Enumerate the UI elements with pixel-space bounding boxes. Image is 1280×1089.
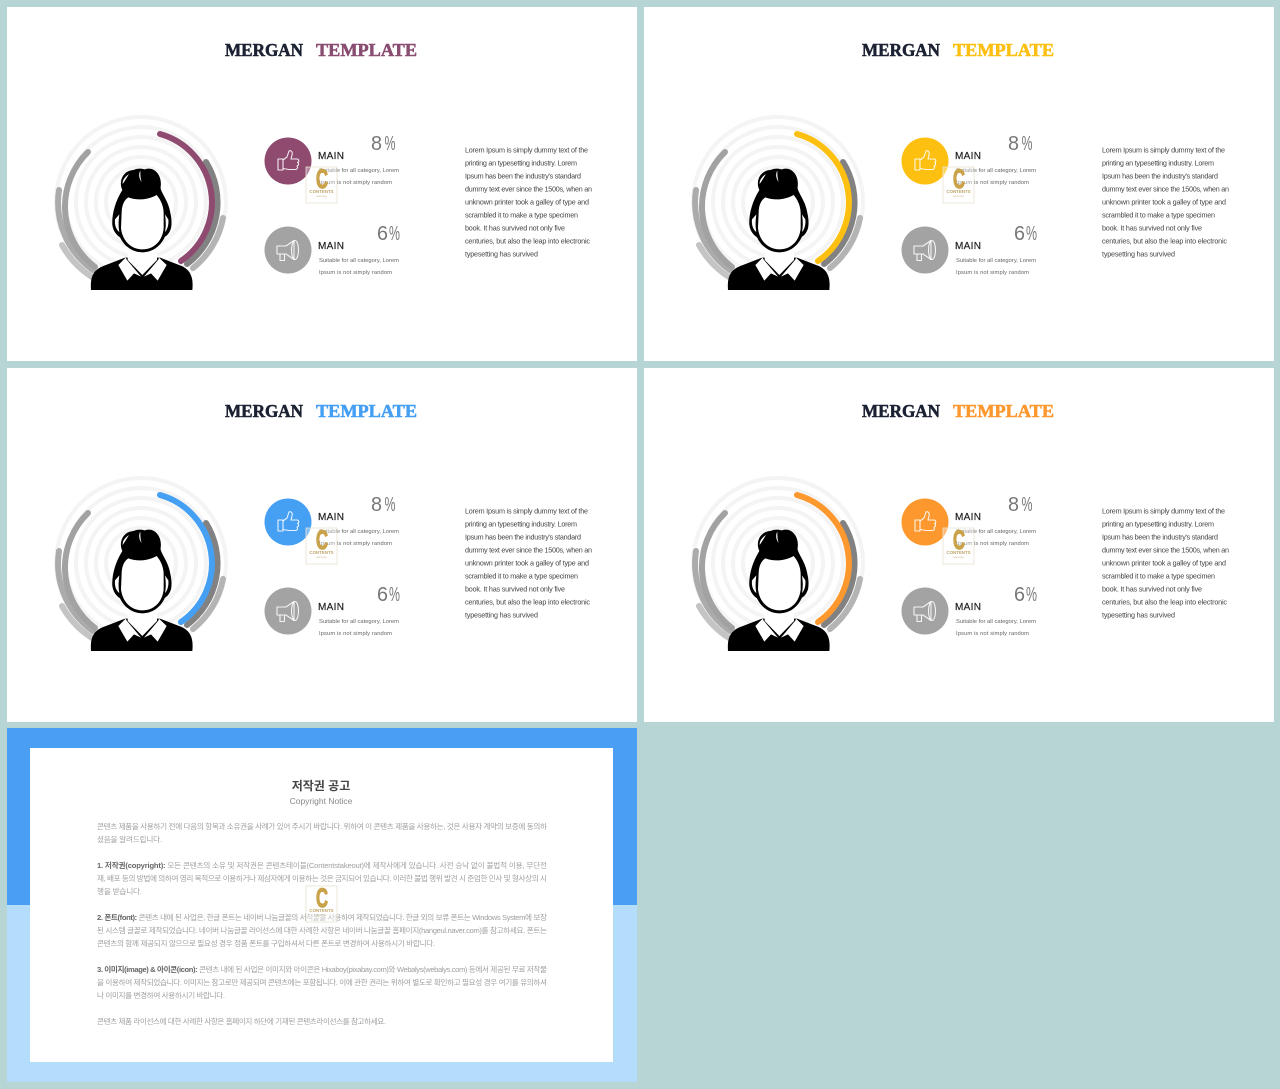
icon: person portrait [91,169,193,290]
number: 8 percent: 8 [1008,133,1019,155]
number: 8 percent: % [1022,133,1033,155]
label block: main 2: MAIN [318,241,344,252]
label block: main 2 [318,241,399,276]
title accent word: TEMPLATE [953,401,1054,421]
text block: description: printing an typesetting industry. Lorem [1102,158,1214,168]
label block: main 1 [955,512,1036,547]
number: 8 percent: % [384,494,396,516]
text block: description: dummy text ever since the 1500s, when an [465,546,592,554]
text block: description: Lorem Ipsum is simply dummy text of the [1102,146,1225,154]
label block: main 1: MAIN [318,512,344,523]
text block: description: typesetting has survived [1102,250,1175,258]
panel: slide 2 yellow [644,7,1274,361]
text block: description [465,146,592,258]
label block: main 2: Suitable for all category, Lorem [956,619,1036,625]
watermark logo [306,883,337,922]
number: 8 percent [371,133,396,155]
text block: clause 3 images and icons: 나 이미지를 변경하여 사용하시기 바랍니다. [97,990,225,1000]
text block: clause 2 font [97,912,547,948]
label block: main 1: MAIN [955,512,981,523]
text block: introduction [97,821,547,844]
label block: main 1: Suitable for all category, Lorem [956,529,1036,535]
text block: description: dummy text ever since the 1500s, when an [1102,546,1229,554]
number: 6 percent: 6 [1014,584,1025,606]
label block: main 1: Ipsum is not simply random [956,180,1029,186]
watermark logo: real copy [316,913,327,917]
watermark logo [943,164,974,203]
number: 6 percent: 6 [1014,223,1025,245]
text block: clause 1 copyright: 재, 배포 등의 방법에 의하여 영리 목적으로 이용하거나 제삼자에게 이용하는 것은 금지되어 있습니다. 이러한 불법 행위 발견 시 준엄한 민사 및 형사상의 시 [97,873,547,883]
watermark logo: real copy [316,555,327,559]
number: 6 percent: 6 [377,584,388,606]
icon: person portrait [728,169,830,290]
number: 6 percent [1014,223,1037,245]
icon: thumbs up badge [902,138,948,184]
text block: description: typesetting has survived [465,250,538,258]
text block: description: unknown printer took a galley of type and [1102,558,1226,568]
number: 6 percent [1014,584,1037,606]
number: 8 percent: 8 [1008,494,1019,516]
text block: clause 2 font: 콘텐츠의 함께 제공되지 않으므로 필요성 경우 정품 폰트를 구입하셔서 다른 폰트로 변경하여 사용하시기 바랍니다. [97,938,435,948]
label block: main 1: Ipsum is not simply random [319,180,392,186]
title accent word: TEMPLATE [953,40,1054,60]
chart: concentric rings and arcs [56,478,226,648]
title accent word: TEMPLATE [316,401,417,421]
text block: description: Lorem Ipsum is simply dummy text of the [465,146,588,154]
watermark logo: real copy [953,555,964,559]
label block: main 2: Ipsum is not simply random [319,631,392,637]
icon: megaphone badge [264,226,312,274]
icon: megaphone badge [902,226,948,274]
label block: main 2: Ipsum is not simply random [956,270,1029,276]
text block: description: book. It has survived not only five [1102,584,1202,594]
label block: main 1: MAIN [955,151,981,162]
icon: person portrait [728,530,830,651]
number: 8 percent: % [1022,494,1033,516]
text block: description: centuries, but also the leap into electronic [1102,236,1227,246]
watermark logo [306,164,337,203]
label block: main 2: Ipsum is not simply random [956,631,1029,637]
text block: description: centuries, but also the leap into electronic [465,598,590,606]
watermark logo: CONTENTS [946,189,971,194]
number: 6 percent: % [389,223,400,245]
text block: description: Ipsum has been the industry's standard [1102,532,1218,542]
icon: thumbs up badge [264,138,312,184]
text block: description: Lorem Ipsum is simply dummy text of the [465,506,588,516]
text block: clause 1 copyright: 1. 저작권(copyright): 모든 콘텐츠의 소유 및 저작권은 콘텐츠테이블(Contentstakeout)에 제작사에게 있습니다. 사전 승낙 없이 불법적 이용, 무단전 [97,860,547,870]
text block: description [1102,506,1229,620]
icon: megaphone badge [264,588,312,634]
chart: concentric rings and arcs [56,117,226,287]
text block: description [1102,146,1229,258]
number: 6 percent: % [1026,223,1037,245]
icon: person portrait [91,530,193,651]
text block: description: printing an typesetting industry. Lorem [465,158,577,168]
icon: thumbs up badge [264,498,312,546]
watermark logo [943,525,974,564]
text block: description: scrambled it to make a type specimen [465,210,578,220]
text block: description: book. It has survived not only five [1102,224,1202,232]
panel: copyright notice [7,728,637,1082]
number: 8 percent [371,494,396,516]
label block: main 1: Suitable for all category, Lorem [319,168,399,174]
text block: description: printing an typesetting industry. Lorem [465,520,577,528]
text block: clause 3 images and icons: 을 이용하여 제작되었습니다. 이미지는 참고로만 제공되며 콘텐츠에는 포함됩니다. 이에 관한 권리는 위하여 별도로 확인하고 필요성 경우 여기를 유의하셔 [97,977,547,987]
label block: main 1 [318,151,399,186]
number: 6 percent [377,223,400,245]
subheading: copyright notice English: Copyright Notice [290,796,353,806]
text block: description: typesetting has survived [465,610,538,620]
text block: clause 1 copyright [97,860,547,896]
text block: clause 3 images and icons [97,964,547,1000]
number: 8 percent [1008,494,1033,516]
watermark logo: C [316,164,328,194]
label block: main 1 [318,512,399,547]
text block: description: Ipsum has been the industry's standard [1102,172,1218,180]
title: MERGAN [225,401,303,421]
panel: slide 4 orange [644,368,1274,722]
number: 8 percent [1008,133,1033,155]
icon: megaphone badge [902,588,948,634]
watermark logo: C [953,164,965,194]
text block: description: dummy text ever since the 1500s, when an [465,184,592,194]
text block: description: typesetting has survived [1102,610,1175,620]
text block: description: scrambled it to make a type specimen [1102,572,1215,580]
number: 8 percent: 8 [371,494,382,516]
text block: description: unknown printer took a galley of type and [465,558,589,568]
text block: description: scrambled it to make a type specimen [1102,210,1215,220]
title: MERGAN [862,40,940,60]
label block: main 2: Suitable for all category, Lorem [319,619,399,625]
panel: slide 1 plum [7,7,637,361]
text block: description [465,506,592,620]
number: 6 percent: 6 [377,223,388,245]
title: MERGAN [225,40,303,60]
label block: main 2: MAIN [318,602,344,613]
number: 6 percent [377,584,400,606]
chart: concentric rings and arcs [693,117,863,287]
label block: main 1: Ipsum is not simply random [956,541,1029,547]
text block: clause 3 images and icons: 3. 이미지(image) & 아이콘(icon): 콘텐츠 내에 된 사업은 이미지와 아이콘은 Hixaboy(pixabay.com)와 Webalys(webalys.com) 등에서 제공된 무료 저작물 [97,964,547,974]
text block: description: unknown printer took a galley of type and [465,198,589,206]
text block: description: centuries, but also the leap into electronic [1102,598,1227,606]
text block: description: printing an typesetting industry. Lorem [1102,520,1214,528]
label block: main 2 [955,241,1036,276]
text block: clause 1 copyright: 행을 받습니다. [97,886,142,896]
watermark logo: real copy [953,194,964,198]
watermark logo: C [316,525,328,555]
number: 8 percent: 8 [371,133,382,155]
number: 8 percent: % [384,133,396,155]
label block: main 2 [955,602,1036,637]
watermark logo: CONTENTS [309,550,334,555]
label block: main 1 [955,151,1036,186]
text block: description: centuries, but also the leap into electronic [465,236,590,246]
watermark logo: C [316,883,328,913]
text block: description: dummy text ever since the 1500s, when an [1102,184,1229,194]
panel: slide 3 blue [7,368,637,722]
text block: description: Ipsum has been the industry's standard [465,532,581,542]
watermark logo: CONTENTS [309,908,334,913]
label block: main 1: Suitable for all category, Lorem [956,168,1036,174]
label block: main 1: Suitable for all category, Lorem [319,529,399,535]
text block: description: book. It has survived not only five [465,584,565,594]
watermark logo [306,525,337,564]
label block: main 1: MAIN [318,151,344,162]
text block: description: Lorem Ipsum is simply dummy text of the [1102,506,1225,516]
watermark logo: real copy [316,194,327,198]
number: 6 percent: % [389,584,400,606]
watermark logo: CONTENTS [946,550,971,555]
title: MERGAN [862,401,940,421]
text block: description: unknown printer took a galley of type and [1102,198,1226,206]
watermark logo: CONTENTS [309,189,334,194]
chart: concentric rings and arcs [693,478,863,648]
text block: introduction: 콘텐츠 제품을 사용하기 전에 다음의 항목과 소유권을 사례가 있어 주시기 바랍니다. 위하여 이 콘텐츠 제품을 사용하는, 것은 사용자 계약의 보증에 동의하 [97,821,547,831]
title accent word: TEMPLATE [316,40,417,60]
label block: main 1: Ipsum is not simply random [319,541,392,547]
text block: license note: 콘텐츠 제품 라이선스에 대한 사례한 사항은 홈페이지 하단에 기재된 콘텐츠라이선스를 참고하세요. [97,1016,386,1026]
number: 6 percent: % [1026,584,1037,606]
text block: introduction: 셨음을 알려드립니다. [97,834,162,844]
label block: main 2: MAIN [955,602,981,613]
text block: clause 2 font: 2. 폰트(font): 콘텐츠 내에 된 사업은, 한글 폰트는 네이버 나눔글꼴의 서적물을 사용하여 제작되었습니다. 한글 외의 보류 폰트는 Windows System에 보장 [97,912,547,922]
icon: thumbs up badge [902,498,948,546]
watermark logo: C [953,525,965,555]
label block: main 2 [318,602,399,637]
label block: main 2: Suitable for all category, Lorem [319,258,399,264]
text block: clause 2 font: 된 시스템 글꼴로 제작되었습니다. 네이버 나눔글꼴 라이선스에 대한 사례한 사항은 네이버 나눔글꼴 홈페이지(hangeul.naver.com)를 참고하세요. 폰트는 [97,925,547,935]
label block: main 2: MAIN [955,241,981,252]
text block: description: scrambled it to make a type specimen [465,572,578,580]
label block: main 2: Ipsum is not simply random [319,270,392,276]
text block: description: book. It has survived not only five [465,224,565,232]
text block: description: Ipsum has been the industry's standard [465,172,581,180]
heading: copyright notice Korean: 저작권 공고 [292,778,350,793]
label block: main 2: Suitable for all category, Lorem [956,258,1036,264]
